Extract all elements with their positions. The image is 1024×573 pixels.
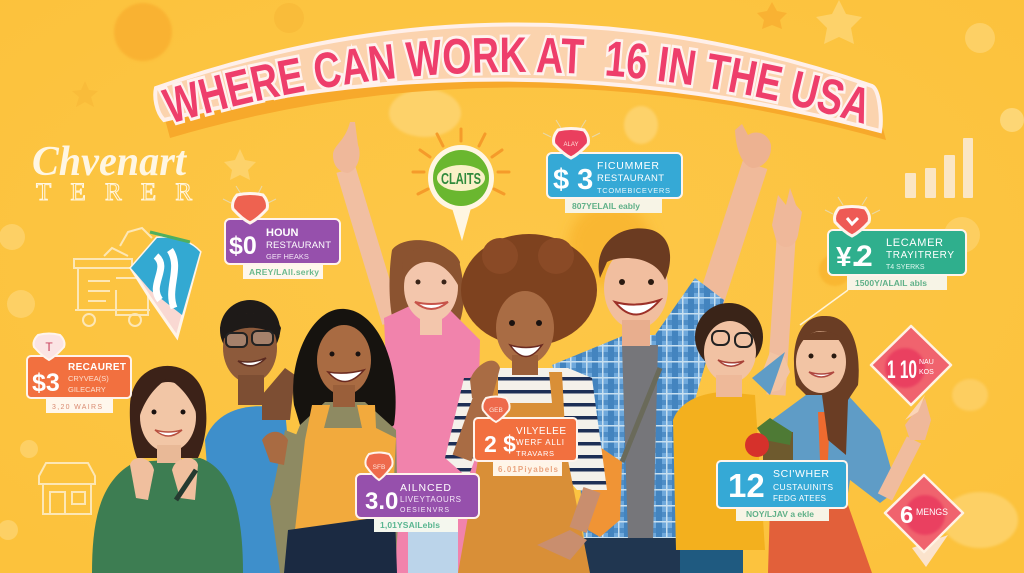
- card: village orange center: VILYELEE: [516, 426, 566, 437]
- card: lecamer green: T4 SYERKS: [886, 264, 925, 271]
- logo text: Chvenart: [32, 139, 187, 185]
- card: village orange center: TRAVARS: [516, 449, 554, 458]
- card: ailnced purple bottom: OESIENVRS: [400, 507, 449, 514]
- card: recruit orange left: RECAURET: [68, 362, 126, 373]
- person: center girl with afro in overalls: [445, 234, 607, 573]
- person: teen in yellow shirt with glasses: [673, 303, 765, 573]
- card: restaurant purple top: RESTAURANT: [266, 240, 331, 251]
- title banner: [153, 22, 886, 140]
- card: restaurant purple top: $0: [229, 232, 257, 260]
- card: summer customer blue bottom: [717, 461, 847, 521]
- logo text: [32, 139, 192, 206]
- card: recruit orange left: 3,20 WAIRS: [52, 404, 102, 411]
- card: lecamer green: 2: [856, 240, 873, 273]
- card: summer customer blue bottom: CUSTAUINITS: [773, 482, 833, 492]
- person: pink shirt girl: [333, 122, 480, 573]
- icon: orange shoulder bag: [588, 445, 622, 537]
- title text: WHERE CAN WORK AT 16 IN THE USA: [158, 33, 867, 126]
- diamond sign: 6: [885, 475, 963, 567]
- logo text: TERER: [36, 179, 192, 206]
- card: summer customer blue bottom: SCI'WHER: [773, 468, 829, 480]
- card: village orange center: WERF ALLI: [516, 438, 564, 447]
- card: restaurant purple top: HOUN: [266, 227, 298, 239]
- card: recruit orange left: T: [45, 340, 53, 354]
- diamond sign: 6: 6: [900, 502, 913, 529]
- card: restaurant purple top: AREY/LAll.serky: [249, 267, 319, 277]
- person: curly hair girl in orange apron: [262, 309, 398, 573]
- card: summer restaurant blue: TCOMEBICEVERS: [597, 186, 670, 195]
- card: summer restaurant blue: RESTAURANT: [597, 173, 664, 184]
- card: ailnced purple bottom: 1,01YSAlLebls: [380, 520, 440, 530]
- card: restaurant purple top: [223, 186, 340, 279]
- card: summer restaurant blue: [543, 120, 682, 213]
- card: village orange center: 2 $: [484, 431, 516, 457]
- center badge: CLAITS: [441, 171, 481, 188]
- card: summer restaurant blue: FICUMMER: [597, 160, 659, 172]
- people group: [92, 122, 931, 573]
- card: summer restaurant blue: 807YELAlL eably: [572, 201, 640, 211]
- card: lecamer green: 1500Y/ALAlL abls: [855, 278, 927, 288]
- diamond sign: 10: KOS: [919, 369, 934, 376]
- card: lecamer green: [800, 197, 966, 325]
- person: girl in denim jacket: [745, 188, 931, 573]
- person: man with glasses in blue t-shirt: [205, 300, 300, 573]
- icon: bar chart: [905, 138, 973, 198]
- person: girl in green shirt: [92, 366, 243, 573]
- card: village orange center: [474, 396, 577, 476]
- card: ailnced purple bottom: AILNCED: [400, 482, 451, 494]
- card: summer restaurant blue: ALAY: [564, 142, 578, 148]
- diamond sign: 6: MENGS: [916, 507, 948, 517]
- card: lecamer green: LECAMER: [886, 237, 943, 249]
- card: ailnced purple bottom: [356, 452, 479, 532]
- card: summer customer blue bottom: FEDG ATEES: [773, 494, 826, 503]
- card: ailnced purple bottom: SFB: [373, 464, 385, 471]
- person: man in plaid shirt: [552, 124, 771, 573]
- icon: store outline: [39, 463, 95, 514]
- card: ailnced purple bottom: 3.0: [365, 488, 398, 515]
- tomato and greens: [745, 418, 793, 464]
- card: village orange center: GEB: [489, 407, 503, 414]
- center badge: [413, 129, 509, 241]
- card: lecamer green: ¥.: [836, 241, 859, 272]
- card: recruit orange left: GILECARY: [68, 385, 106, 394]
- card: summer customer blue bottom: 12: [728, 467, 765, 504]
- card: ailnced purple bottom: LIVEYTAOURS: [400, 495, 461, 504]
- diamond sign: 10: NAU: [919, 359, 934, 366]
- icon: food cart with wedge: [74, 228, 200, 337]
- diamond sign: 10: [871, 326, 951, 420]
- diamond sign: 10: 1 10: [887, 356, 917, 384]
- card: summer customer blue bottom: NOY/LJAV a ekle: [746, 509, 814, 519]
- card: lecamer green: TRAYITRERY: [886, 250, 954, 261]
- card: summer restaurant blue: $ 3: [553, 164, 593, 196]
- card: restaurant purple top: GEF HEAKS: [266, 252, 309, 261]
- card: recruit orange left: CRYVEA(S): [68, 374, 109, 383]
- card: recruit orange left: [27, 334, 131, 413]
- card: village orange center: 6.01Piyabels: [498, 465, 559, 474]
- card: recruit orange left: $3: [32, 369, 60, 397]
